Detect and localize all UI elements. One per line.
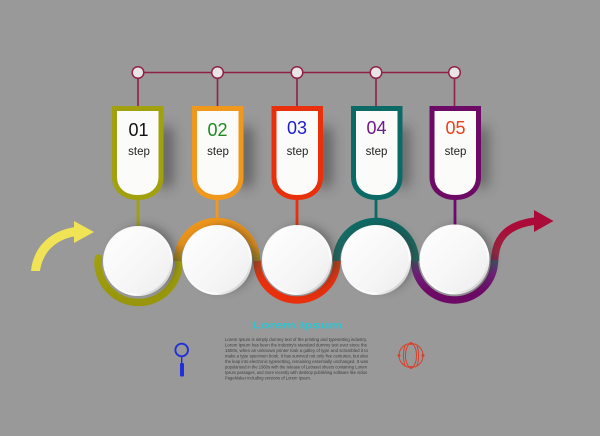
body text block: PageMaker including versions of Lorem Ipsum. [225,376,311,382]
ribbon segment 1 [98,258,179,302]
node 1 [132,67,144,78]
card 1: 01 [128,120,149,140]
node 5 [449,67,460,78]
card 2 [194,108,241,198]
card 3: 03 [287,118,307,138]
circle 2 [182,225,252,295]
node 2 [212,67,223,78]
body text block: Ipsum passages, and more recently with desktop publishing software like Aldus [225,370,368,376]
vertical stems from cards to ribbon [138,198,455,230]
card 1: step [128,146,150,158]
card 1 [114,108,161,198]
ribbon segment 2 [178,222,256,261]
top connector line with nodes [132,67,460,107]
card 2: 02 [207,120,228,140]
circle 4 [341,225,411,295]
heading: Lorem Ipsum [252,320,342,332]
card 3 [274,108,320,198]
body text block: popularised in the 1960s with the release of Letraset sheets containing Lorem [225,364,367,370]
card 5: 05 [445,118,466,138]
card shadows [158,126,488,188]
card 4: 04 [366,118,387,138]
card 3: step [287,146,308,158]
circle 5 [420,224,490,294]
ribbon segment 3 [257,260,337,300]
card 5: step [445,146,466,158]
node 3 [291,67,303,78]
icon: magnifying glass [175,344,188,376]
ribbon segment 5 to arrow [494,221,536,262]
body text block: make a type specimen book. It has survived not only five centuries, but also [225,354,368,360]
card 5 [432,108,478,198]
arrow: exit arrow head [534,210,554,232]
ribbon: winding path through the circles [98,221,536,302]
ribbon segment 4 [336,222,416,261]
arrow: yellow entry arrow [31,221,94,271]
icon: globe [398,342,424,368]
body text block: Lorem Ipsum has been the industry's standard dummy text ever since the [225,342,367,348]
node 4 [370,67,382,78]
ribbon segment 5 [414,260,494,300]
card 4 [354,108,400,198]
circle shadows [111,225,493,291]
body text block: Lorem Ipsum is simply dummy text of the printing and typesetting industry. [225,337,367,343]
card 2: step [207,146,229,158]
card 4: step [366,146,387,158]
body text block: the leap into electronic typesetting, remaining essentially unchanged. It was [225,359,369,365]
circle 3 [262,225,332,295]
body text block: 1500s, when an unknown printer took a galley of type and scrambled it to [225,348,368,354]
circle 1 [103,226,173,296]
body text block [225,337,369,382]
